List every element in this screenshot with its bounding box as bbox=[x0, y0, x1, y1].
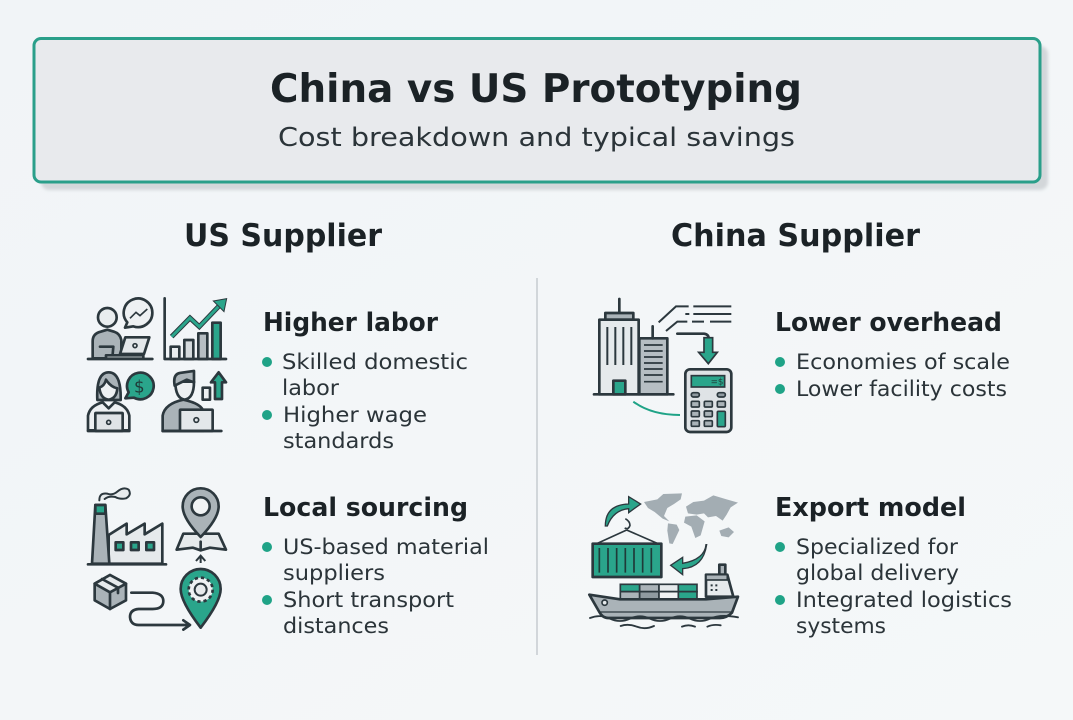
hull bbox=[589, 595, 738, 618]
waves bbox=[590, 616, 738, 628]
text block: Export model: systems bbox=[796, 614, 886, 639]
box bbox=[95, 575, 126, 609]
text block: Export model bbox=[775, 493, 1012, 639]
heading: Lower overhead: Lower overhead bbox=[775, 308, 1002, 338]
icon: buildings and calculator: =$ bbox=[711, 378, 723, 388]
speech bubble with dollar bbox=[125, 373, 154, 399]
hook and cables bbox=[597, 519, 657, 543]
text block: Lower overhead bbox=[775, 308, 1010, 402]
route arrow bbox=[130, 593, 190, 630]
text block: Higher labor: Skilled domestic bbox=[282, 350, 468, 375]
man with laptop bbox=[163, 400, 203, 431]
text block: Higher labor: Higher wage bbox=[283, 403, 427, 428]
text block: Higher labor: standards bbox=[283, 429, 394, 454]
factory bbox=[109, 524, 162, 564]
world map bbox=[644, 493, 738, 544]
text block: Local sourcing: Short transport bbox=[283, 588, 454, 613]
container bbox=[593, 544, 661, 577]
heading: Export model: Export model bbox=[775, 493, 966, 523]
icon: workers, growth chart and wages: $ bbox=[134, 377, 145, 396]
text block: Local sourcing: distances bbox=[283, 614, 389, 639]
teal curve bbox=[633, 402, 680, 415]
heading: Local sourcing: Local sourcing bbox=[263, 493, 468, 523]
subtitle: Cost breakdown and typical savings bbox=[278, 123, 795, 153]
smoke bbox=[99, 488, 130, 500]
ship cargo bbox=[620, 584, 697, 599]
text block: Local sourcing: suppliers bbox=[283, 561, 385, 586]
icon: export ship and world map bbox=[589, 493, 738, 628]
heading: Higher labor: Higher labor bbox=[263, 308, 438, 338]
text block: Local sourcing bbox=[262, 493, 489, 639]
icon: factory and local sourcing bbox=[88, 488, 226, 630]
gear pin bbox=[181, 569, 221, 628]
title: China vs US Prototyping bbox=[270, 67, 802, 112]
buildings bbox=[615, 299, 623, 313]
map pin bbox=[177, 534, 226, 550]
text block: Higher labor: labor bbox=[282, 376, 339, 401]
icon: buildings and calculator bbox=[594, 299, 731, 432]
growth chart bbox=[165, 298, 226, 359]
text block: Higher labor bbox=[262, 308, 468, 454]
heading: China Supplier: China Supplier bbox=[671, 218, 921, 254]
person one bbox=[93, 330, 121, 358]
document lines bbox=[659, 306, 731, 331]
woman with laptop bbox=[97, 372, 121, 400]
heading: US Supplier: US Supplier bbox=[184, 218, 383, 254]
header panel bbox=[34, 38, 1048, 190]
text block: Export model: Integrated logistics bbox=[796, 588, 1012, 613]
text block: Export model: Specialized for bbox=[796, 535, 958, 560]
calculator bbox=[685, 369, 731, 432]
bridge bbox=[719, 565, 725, 575]
text block: Local sourcing: US-based material bbox=[283, 535, 489, 560]
icon: workers, growth chart and wages bbox=[88, 298, 227, 431]
text block: Lower overhead: Economies of scale bbox=[796, 350, 1010, 375]
text block: Lower overhead: Lower facility costs bbox=[796, 377, 1007, 402]
text block: Export model: global delivery bbox=[796, 561, 959, 586]
down arrow bbox=[677, 334, 709, 338]
teal curved arrows bbox=[605, 497, 641, 526]
